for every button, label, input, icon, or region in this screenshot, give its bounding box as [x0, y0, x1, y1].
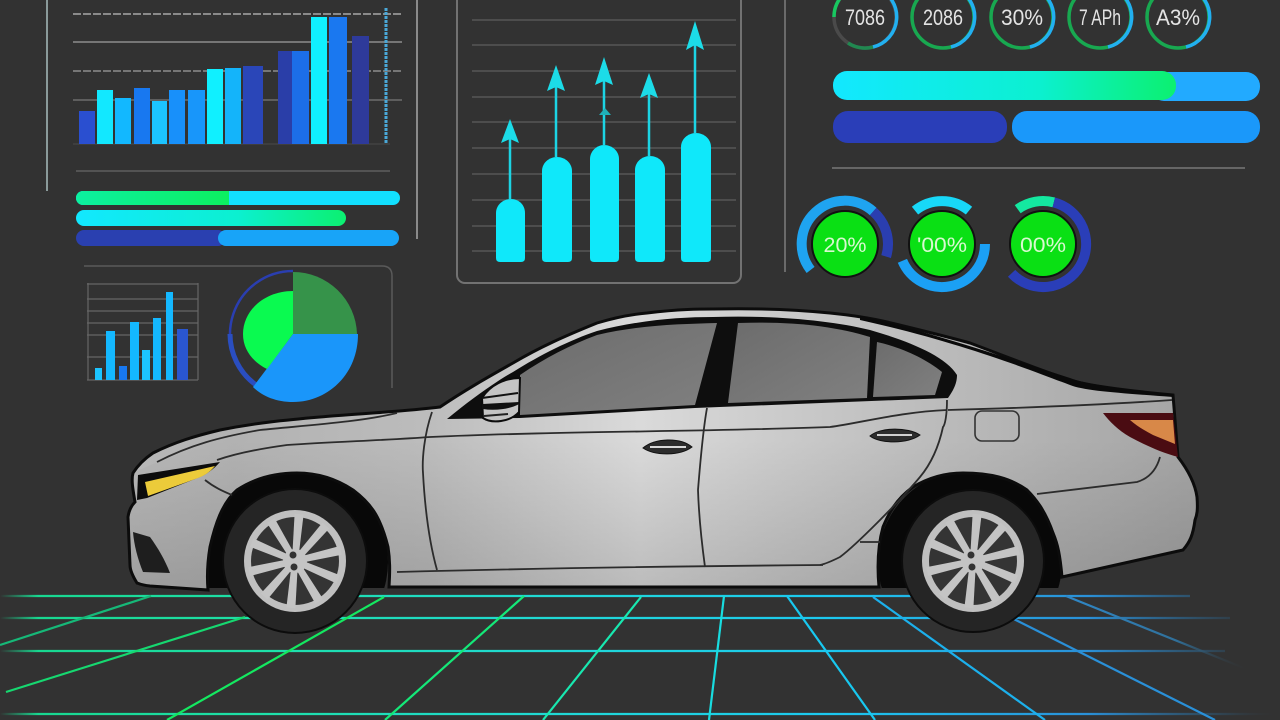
panel: top-left bar chart — [47, 0, 417, 246]
small bar chart — [87, 283, 198, 380]
gauge 1: 20% — [824, 234, 866, 257]
door handles — [643, 429, 920, 454]
top gauge rings — [834, 0, 1210, 48]
pie chart — [230, 271, 358, 402]
window frame — [447, 317, 957, 419]
rear window — [728, 323, 870, 403]
ring 2: 2086 — [923, 5, 963, 30]
hood and door lines — [157, 400, 1172, 572]
body shading — [129, 395, 1197, 589]
ring 3: 30% — [1001, 5, 1043, 30]
car body — [128, 309, 1197, 590]
divider line right of centre panel — [784, 0, 786, 272]
gauge 2: '00% — [917, 234, 967, 257]
bars — [79, 17, 369, 144]
arrows — [501, 21, 704, 200]
bars — [496, 133, 711, 262]
gauge 3 — [1010, 201, 1086, 287]
panel: small bar chart and pie — [84, 266, 392, 402]
top-right progress bars — [832, 71, 1260, 168]
front wheel — [223, 489, 367, 633]
ring 3 — [991, 0, 1054, 48]
rear quarter window — [873, 342, 942, 397]
tail light — [1103, 413, 1178, 457]
front grille — [133, 532, 170, 573]
rear roof band — [860, 316, 1173, 397]
rear wheel — [902, 490, 1044, 632]
perspective floor grid — [0, 596, 1280, 720]
ring 5 — [1147, 0, 1210, 48]
panel: centre rising bar chart — [457, 0, 741, 283]
fuel door — [975, 411, 1019, 441]
ring 4 — [1069, 0, 1132, 48]
ring 5: A3% — [1156, 5, 1200, 30]
gauge 1 — [802, 201, 888, 277]
ring 2 — [912, 0, 975, 48]
car — [128, 309, 1197, 654]
ring 1 — [834, 0, 897, 48]
green gauges — [802, 201, 1086, 287]
side mirror — [482, 378, 520, 421]
front window — [520, 323, 717, 415]
progress bars — [76, 191, 400, 246]
ring 1: 7086 — [845, 5, 885, 30]
headlight — [137, 462, 220, 500]
wheel arches — [209, 474, 1060, 588]
gauge 2 — [902, 201, 985, 287]
ring 4: 7 APh — [1079, 5, 1121, 30]
gauge 3: 00% — [1020, 234, 1066, 257]
